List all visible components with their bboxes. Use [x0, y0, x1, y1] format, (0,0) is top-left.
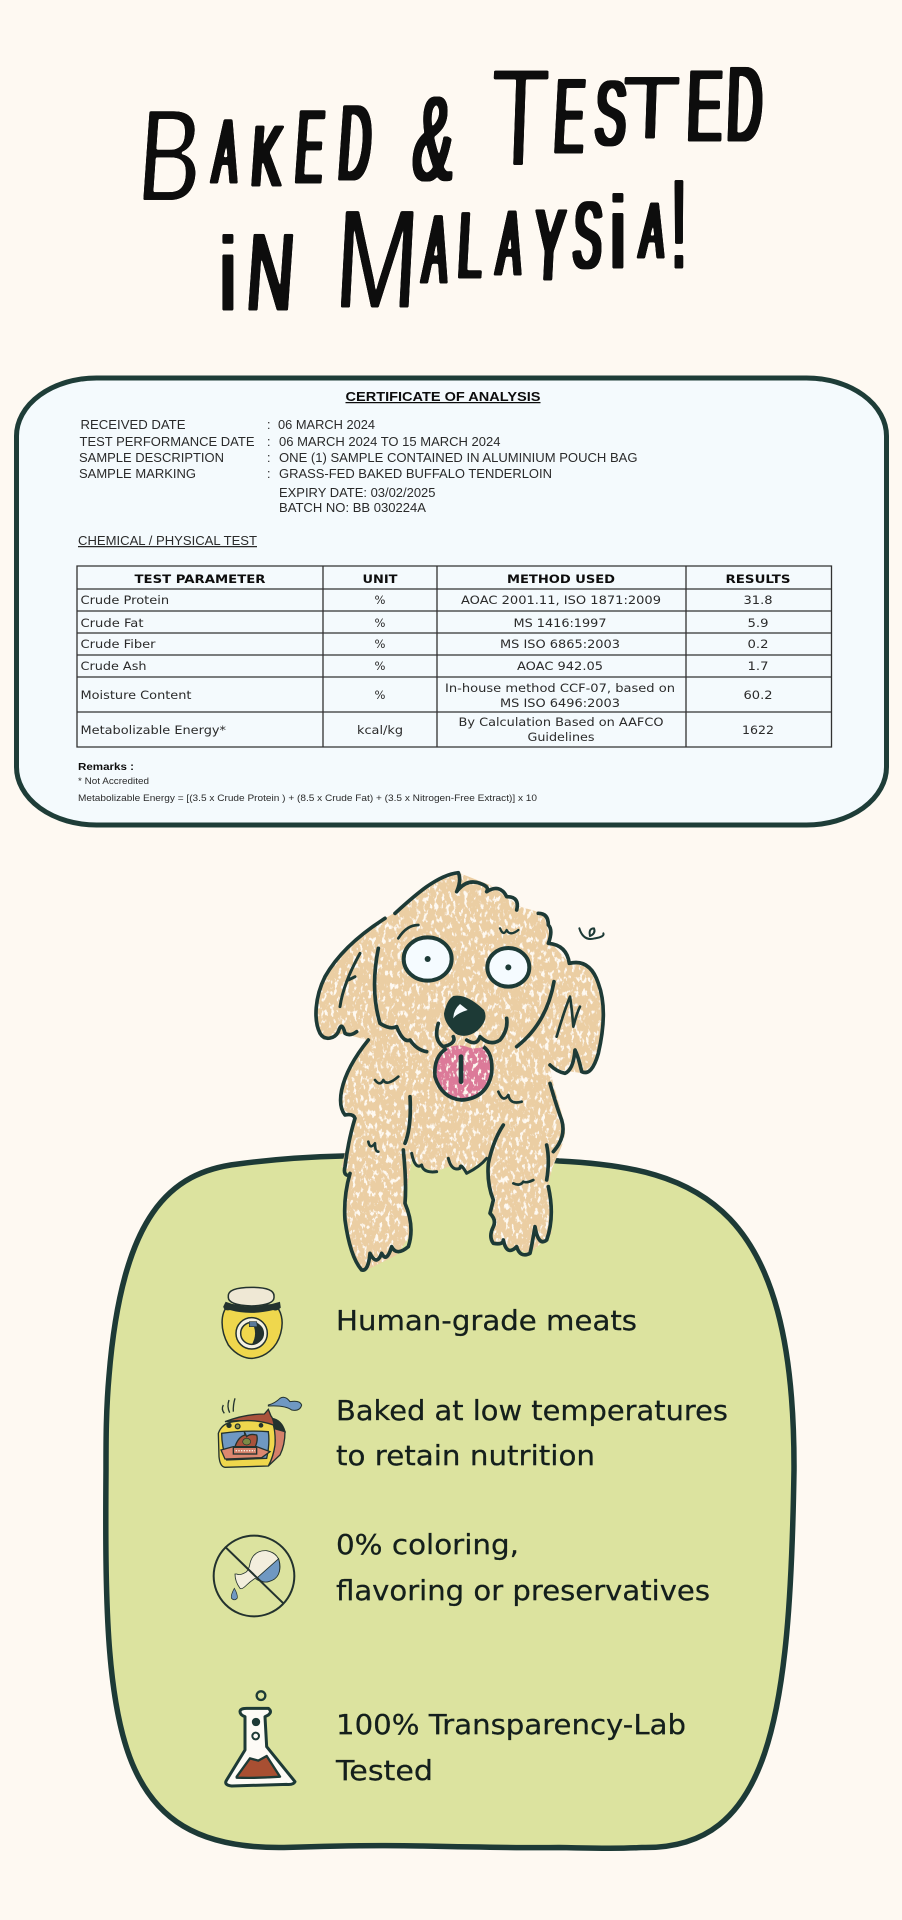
results table: Crude Ash [80, 659, 146, 673]
sample details: TEST PERFORMANCE DATE [80, 435, 255, 449]
results table [77, 566, 832, 747]
sample details: GRASS-FED BAKED BUFFALO TENDERLOIN [279, 467, 552, 481]
results table: TEST PARAMETER [134, 572, 266, 586]
dog left eye [404, 937, 452, 981]
dog right eye [487, 948, 529, 987]
remarks: * Not Accredited [78, 776, 149, 787]
results table: Crude Fiber [80, 637, 156, 651]
title: & [409, 73, 459, 207]
results table: MS ISO 6496:2003 [500, 696, 620, 710]
title: E [552, 58, 587, 177]
title: ! [673, 153, 685, 295]
sample details: RECEIVED DATE [80, 418, 186, 432]
benefit: lab tested: 100% Transparency-Lab [336, 1708, 686, 1741]
sample details: : [267, 418, 270, 432]
title: A [638, 187, 668, 276]
title: M [331, 180, 423, 340]
benefit: no additives: flavoring or preservatives [336, 1574, 710, 1607]
panel: certificate of analysis [16, 378, 886, 825]
remarks: Remarks : [78, 762, 134, 773]
title: i [219, 216, 237, 332]
results table: Guidelines [528, 730, 595, 744]
benefit: no additives [336, 1528, 710, 1607]
title: A [495, 190, 525, 295]
results table: 0.2 [748, 637, 768, 651]
sample details: 06 MARCH 2024 TO 15 MARCH 2024 [279, 435, 501, 449]
results table: Metabolizable Energy* [80, 723, 226, 737]
title: L [456, 191, 485, 299]
remarks: Metabolizable Energy = [(3.5 x Crude Protein ) + (8.5 x Crude Fat) + (3.5 x Nitrogen-Free Extract)] x 10 [78, 793, 537, 804]
sample details: SAMPLE DESCRIPTION [79, 451, 224, 465]
title [134, 41, 764, 340]
panel: green benefits blob [106, 1155, 794, 1848]
results table: kcal/kg [357, 723, 403, 737]
title: T [620, 59, 682, 157]
benefit: baked at low temperatures: to retain nutrition [336, 1439, 595, 1472]
section label: CHEMICAL / PHYSICAL TEST [78, 534, 257, 548]
sample details: ONE (1) SAMPLE CONTAINED IN ALUMINIUM POUCH BAG [279, 451, 638, 465]
icon: no additives sign [214, 1536, 294, 1616]
title: E [292, 88, 327, 205]
dog nose [444, 996, 485, 1036]
sample details: BATCH NO: BB 030224A [279, 501, 427, 515]
title: S [571, 181, 605, 289]
dog fur fill [317, 873, 605, 1272]
title: A [211, 100, 241, 203]
results table: Crude Fat [80, 616, 144, 630]
title: N [243, 211, 298, 334]
results table: AOAC 942.05 [517, 659, 603, 673]
title: A [421, 194, 452, 304]
certificate heading: CERTIFICATE OF ANALYSIS [346, 390, 540, 404]
title: E [685, 51, 724, 164]
results table: MS ISO 6865:2003 [500, 637, 620, 651]
results table: Moisture Content [80, 688, 192, 702]
icon: lab flask [226, 1691, 295, 1786]
sample details: : [267, 435, 270, 449]
illustration: dog [316, 873, 605, 1272]
results table: In-house method CCF-07, based on [445, 681, 675, 695]
results table: 31.8 [744, 593, 772, 607]
results table: 1.7 [748, 659, 768, 673]
results table: By Calculation Based on AAFCO [458, 715, 664, 729]
benefit: lab tested: Tested [335, 1754, 433, 1787]
title: D [725, 44, 764, 164]
sample details: : [267, 451, 270, 465]
icon: honey jar [222, 1287, 282, 1358]
benefit: lab tested [335, 1708, 686, 1787]
dog outline [316, 873, 604, 1270]
sample details: EXPIRY DATE: 03/02/2025 [279, 486, 436, 500]
title: i [609, 175, 627, 290]
dog tongue [435, 1045, 492, 1100]
results table: % [375, 616, 386, 630]
sample details: 06 MARCH 2024 [278, 418, 375, 432]
results table: % [375, 688, 386, 702]
sample details: SAMPLE MARKING [79, 467, 196, 481]
benefit: human-grade meats: Human-grade meats [336, 1304, 637, 1337]
results table: MS 1416:1997 [514, 616, 606, 630]
title: Y [532, 188, 567, 302]
benefit: baked at low temperatures: Baked at low temperatures [336, 1394, 728, 1427]
results table: % [375, 659, 386, 673]
title: K [249, 107, 286, 205]
results table: 60.2 [744, 688, 772, 702]
benefit: no additives: 0% coloring, [336, 1528, 519, 1561]
sample details [79, 418, 638, 515]
results table: Crude Protein [80, 593, 169, 607]
results table: % [375, 637, 386, 651]
results table: AOAC 2001.11, ISO 1871:2009 [461, 593, 661, 607]
results table: % [375, 593, 386, 607]
results table: RESULTS [726, 572, 790, 586]
title: D [335, 83, 375, 204]
remarks [78, 762, 537, 804]
results table: METHOD USED [507, 572, 615, 586]
results table: 5.9 [748, 616, 768, 630]
title: T [488, 41, 551, 196]
icon: oven [218, 1397, 302, 1467]
title: B [134, 82, 206, 230]
benefits list [335, 1304, 728, 1787]
results table: UNIT [362, 572, 398, 586]
sample details: : [267, 467, 270, 481]
benefit: baked at low temperatures [336, 1394, 728, 1472]
title: S [593, 63, 629, 165]
results table: 1622 [742, 723, 774, 737]
